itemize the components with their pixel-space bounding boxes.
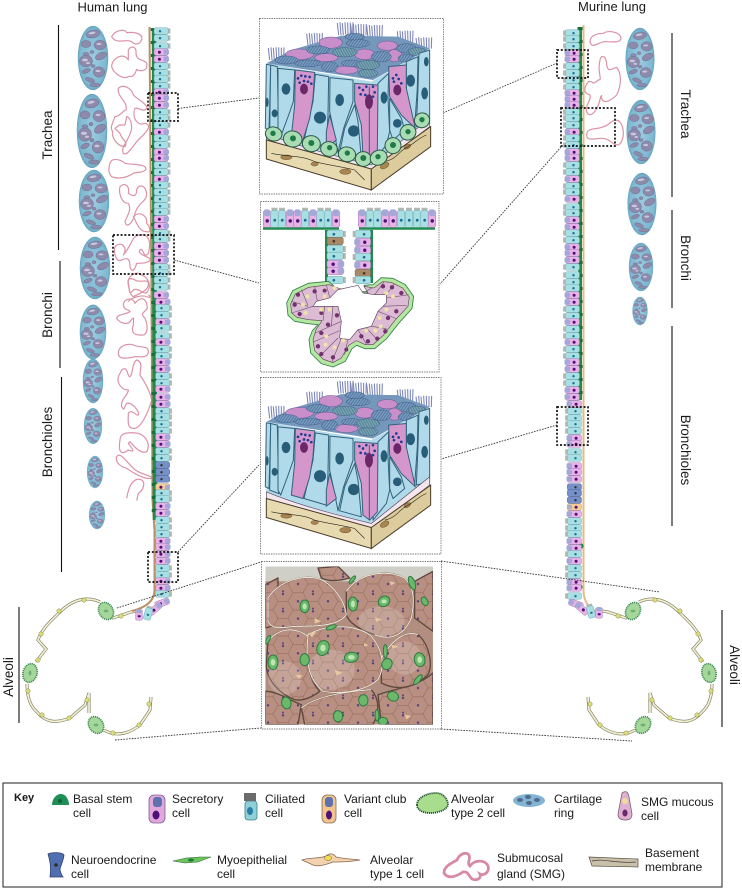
label: Bronchi: Bronchi — [40, 292, 55, 338]
panel: submucosal gland — [260, 202, 439, 372]
key panel — [3, 783, 722, 887]
gland duct right — [353, 230, 372, 284]
key: basement membrane: Basement — [645, 846, 700, 860]
submucosal glands: human lower — [116, 279, 152, 501]
panel: tracheal epithelium 3D block — [260, 18, 444, 194]
airway epithelium column: human — [132, 27, 172, 621]
key: SMG mucous cell — [618, 792, 714, 823]
key: ciliated cell: cell — [265, 806, 283, 820]
key: SMG mucous cell: cell — [641, 809, 659, 823]
submucosal glands: murine — [585, 32, 623, 145]
submucosal glands: human — [109, 30, 150, 302]
key: alveolar type 2 cell: type 2 cell — [451, 806, 505, 820]
key: myoepithelial cell: cell — [217, 867, 235, 881]
label: Alveoli: Alveoli — [1, 657, 16, 697]
key: neuroendocrine cell: Neuroendocrine — [71, 853, 157, 867]
key: basal stem cell — [52, 792, 132, 820]
key: neuroendocrine cell: cell — [71, 867, 89, 881]
key: secretory cell: cell — [172, 806, 190, 820]
panel: alveolar sac surface — [262, 562, 442, 729]
key: neuroendocrine cell — [48, 853, 157, 881]
label: Bronchioles murine: Bronchioles — [678, 415, 693, 486]
key: alveolar type 2 cell: Alveolar — [451, 792, 494, 806]
key: alveolar type 1 cell: Alveolar — [370, 853, 413, 867]
key heading: Key — [14, 792, 35, 804]
surface epithelium left — [263, 208, 340, 228]
key: myoepithelial cell — [173, 853, 287, 881]
key: myoepithelial cell: Myoepithelial — [217, 853, 287, 867]
key: cartilage ring — [513, 792, 602, 820]
airway epithelium column: murine — [563, 25, 602, 619]
label: Trachea murine: Trachea — [678, 89, 693, 139]
cartilage rings: murine — [626, 28, 656, 325]
key: submucosal gland: gland (SMG) — [497, 867, 565, 881]
label: Bronchioles: Bronchioles — [40, 406, 55, 477]
key: secretory cell: Secretory — [172, 792, 223, 806]
key: alveolar type 1 cell: type 1 cell — [370, 867, 424, 881]
key: variant club cell: cell — [344, 806, 362, 820]
key: ciliated cell — [244, 792, 305, 820]
region labels: murine lung — [672, 33, 742, 727]
gland duct left — [326, 230, 346, 284]
connector lines: zoom boxes to panels — [115, 63, 660, 741]
basal stem cells on tracheal block — [264, 110, 432, 168]
key: variant club cell — [322, 792, 407, 823]
key: cartilage ring: Cartilage — [554, 792, 602, 806]
region labels: human lung — [1, 25, 62, 723]
key: alveolar type 2 cell — [417, 792, 505, 820]
zoom boxes: dotted outlines on airway columns — [113, 50, 615, 582]
label: Alveoli murine: Alveoli — [727, 645, 742, 685]
surface epithelium right — [358, 208, 436, 228]
key: basement membrane — [589, 846, 703, 874]
key: basal stem cell: Basal stem — [73, 792, 132, 806]
key: secretory cell — [149, 792, 223, 823]
key: SMG mucous cell: SMG mucous — [641, 795, 714, 809]
alveoli: human — [21, 598, 151, 736]
key: submucosal gland: Submucosal — [497, 851, 563, 865]
key: basal stem cell: cell — [73, 806, 91, 820]
key: cartilage ring: ring — [554, 806, 574, 820]
cartilage rings: human — [77, 26, 110, 529]
key: basement membrane: membrane — [645, 860, 703, 874]
gland acinus: mucous cells and myoepithelial layer — [287, 278, 414, 367]
alveoli: murine — [588, 598, 718, 736]
key: variant club cell: Variant club — [344, 792, 407, 806]
key: alveolar type 1 cell — [302, 853, 424, 881]
label: Bronchi murine: Bronchi — [678, 235, 693, 281]
key: ciliated cell: Ciliated — [265, 792, 305, 806]
label: Trachea: Trachea — [40, 110, 55, 160]
key: submucosal gland — [444, 851, 565, 881]
panel: bronchiolar epithelium 3D block — [260, 378, 441, 554]
